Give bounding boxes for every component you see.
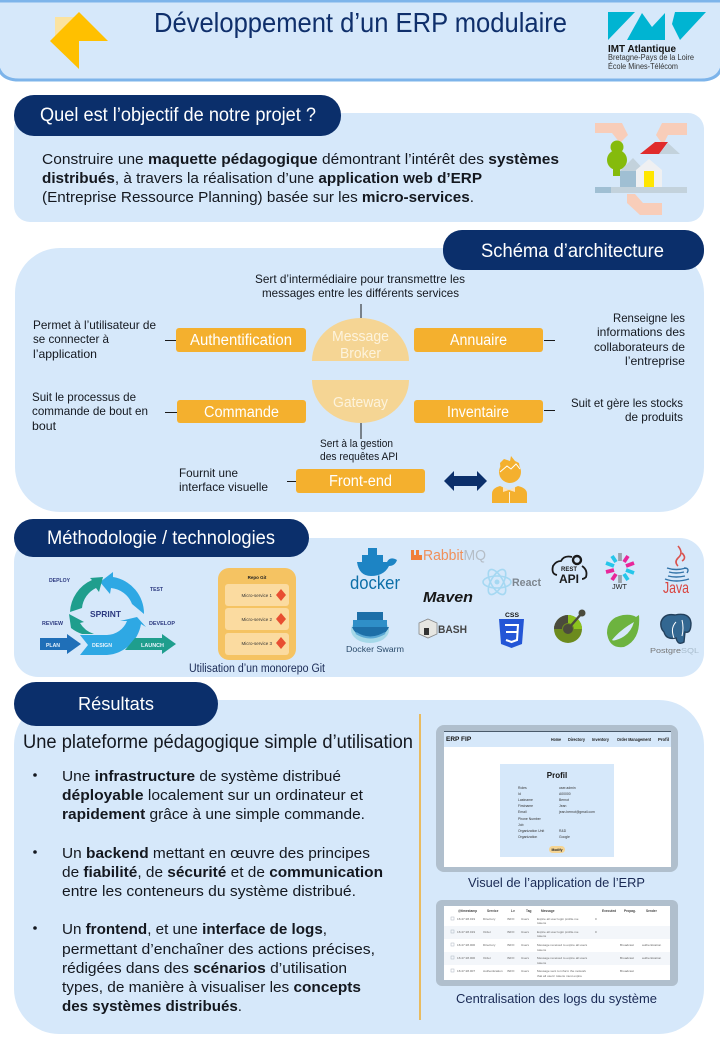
screenshot: application ERP: Jean <box>559 804 566 808</box>
bullet: infrastructure: déployable localement sur un ordinateur et <box>62 787 364 804</box>
screenshot: logs table: that all users' tokens must expire <box>537 974 582 978</box>
panel: résultats <box>14 682 704 1034</box>
service: front-end <box>296 469 425 493</box>
screenshot: logs table: INFO <box>507 969 515 973</box>
screenshot: logs table: Directory <box>483 943 496 947</box>
diagram: sprint cycle: DESIGN <box>92 643 112 649</box>
screenshot: logs table: authentication <box>642 956 662 960</box>
screenshot: logs table: Message sent to inform the network <box>537 969 586 973</box>
screenshot: logs table: Message received to expire all users <box>537 956 588 960</box>
diagram: sprint cycle: SPRINT <box>90 609 122 619</box>
logo: docker: docker <box>350 573 400 593</box>
screenshot: logs table <box>436 900 678 986</box>
screenshot: application ERP: A00000 <box>559 792 571 796</box>
text: message broker description: messages entre les différents services <box>262 286 459 300</box>
service: front-end: Front-end <box>329 473 392 490</box>
screenshot: application ERP: Job <box>518 823 524 827</box>
panel: header <box>0 1 720 80</box>
screenshot: application ERP: Organization Unit <box>518 829 544 833</box>
panel: architecture <box>15 230 704 512</box>
service: commande <box>177 400 306 423</box>
text: front-end description <box>179 466 268 494</box>
screenshot: application ERP: Profil <box>658 737 669 742</box>
screenshot: logs table: tokens <box>537 948 547 952</box>
screenshot: application ERP: Inventory <box>592 737 610 742</box>
screenshot: logs table: 16:47:28.019 <box>457 930 475 934</box>
screenshot: application ERP: ERP FIP <box>446 736 472 743</box>
logo: react: React <box>512 577 541 589</box>
screenshot: logs table: Expire all user login profile.me <box>537 930 579 934</box>
screenshot: logs table: Message received to expire all users <box>537 943 588 947</box>
diagram: monorepo git: Micro-service 2 <box>241 617 272 622</box>
screenshot: application ERP: jean.bernot@gmail.com <box>558 810 595 814</box>
screenshot: application ERP: Email <box>518 810 527 814</box>
text: authentification description: se connecter à <box>33 332 109 346</box>
screenshot: logs table: Users <box>521 943 530 947</box>
bullet: infrastructure: Une infrastructure de système distribué <box>62 768 341 785</box>
service: inventaire <box>414 400 543 423</box>
screenshot: application ERP: Firstname <box>518 804 533 808</box>
bullet: frontend: permettant d’enchaîner des actions précises, <box>62 941 375 958</box>
text: gateway description: des requêtes API <box>320 451 398 463</box>
screenshot: logs table: Message <box>541 909 555 913</box>
logo: IMT Atlantique: Bretagne-Pays de la Loire <box>608 53 695 62</box>
logo: bash: BASH <box>438 624 467 636</box>
text: gateway description <box>320 438 398 463</box>
screenshot: application ERP: Home <box>551 737 562 742</box>
text: annuaire description: Renseigne les <box>613 311 685 325</box>
arrow: front-end to user <box>444 471 487 491</box>
screenshot: application ERP: Phone Number <box>518 817 542 821</box>
logo: IMT Atlantique <box>608 12 706 71</box>
service: authentification <box>176 328 306 352</box>
heading: objectif: Quel est l’objectif de notre projet ? <box>40 105 316 126</box>
logo: jwt <box>606 553 634 591</box>
screenshot: logs table: Directory <box>483 917 496 921</box>
text: inventaire description: Suit et gère les stocks <box>571 396 683 410</box>
bullet: backend <box>33 845 383 900</box>
bullet: infrastructure <box>33 768 365 823</box>
text: authentification description <box>33 318 156 361</box>
heading: architecture: Schéma d’architecture <box>481 241 664 262</box>
heading: méthodologie <box>14 519 309 557</box>
screenshot: application ERP: Google <box>559 835 570 839</box>
screenshot: application ERP: Id <box>518 792 521 796</box>
text: inventaire description <box>571 396 683 424</box>
subheading: plateforme: Une plateforme pédagogique simple d’utilisation <box>23 732 413 753</box>
text: front-end description: interface visuelle <box>179 480 268 494</box>
panel: méthodologie <box>14 519 704 677</box>
diagram: sprint cycle: DEPLOY <box>49 578 70 584</box>
screenshot: logs table: 16:47:28.000 <box>457 956 475 960</box>
logo: java <box>663 546 689 597</box>
heading: objectif <box>14 95 341 136</box>
screenshot: application ERP: Order Management <box>617 737 652 742</box>
screenshot: logs table: Tag <box>526 909 531 913</box>
service: annuaire <box>414 328 543 352</box>
screenshot: logs table: Lv <box>511 909 515 913</box>
logo: rabbitmq: RabbitMQ <box>423 547 486 564</box>
service: annuaire: Annuaire <box>450 332 507 349</box>
bullet: backend: entre les conteneurs du système distribué. <box>62 883 356 900</box>
screenshot: logs table: Broadcast <box>620 956 634 960</box>
bullet: infrastructure: rapidement grâce à une simple commande. <box>62 806 365 823</box>
caption: application: Visuel de l’application de l’ERP <box>468 875 645 890</box>
screenshot: application ERP: Modify <box>552 848 563 852</box>
message broker block: Message <box>332 328 389 345</box>
bullet: backend: Un backend mettant en œuvre des principes <box>62 845 370 862</box>
screenshot: logs table: 16:47:28.019 <box>457 917 475 921</box>
text: annuaire description: collaborateurs de <box>594 340 685 354</box>
logo: jwt: JWT <box>612 582 627 591</box>
diagram: sprint cycle: REVIEW <box>42 621 64 627</box>
diagram: monorepo git <box>218 568 296 660</box>
text block: objectif: distribués, à travers la réalisation d’une application web d’ERP <box>42 170 482 187</box>
screenshot: application ERP: Profil <box>547 771 567 780</box>
title: Développement d’un ERP modulaire <box>154 7 567 38</box>
screenshot: logs table: tokens <box>537 921 547 925</box>
diagram: sprint cycle: PLAN <box>46 643 60 649</box>
text block: objectif: (Entreprise Ressource Planning) basée sur les micro-services. <box>42 189 474 206</box>
screenshot: logs table: Users <box>521 917 530 921</box>
bullet: frontend: des systèmes distribués. <box>62 998 242 1015</box>
screenshot: logs table: Sender <box>646 909 658 913</box>
logo: maven: Maven <box>423 589 473 606</box>
message broker block: Broker <box>340 345 381 362</box>
screenshot: logs table: Expire all user login profile.me <box>537 917 579 921</box>
screenshot: application ERP: Bernot <box>559 798 569 802</box>
screenshot: logs table: INFO <box>507 956 515 960</box>
screenshot: logs table: Users <box>521 956 530 960</box>
logo: rest api: REST <box>561 567 577 573</box>
heading: résultats: Résultats <box>78 694 154 714</box>
text: annuaire description: informations des <box>597 325 685 339</box>
heading: méthodologie: Méthodologie / technologies <box>47 528 275 549</box>
screenshot: logs table: Broadcast <box>620 943 634 947</box>
text: message broker description: Sert d’intermédiaire pour transmettre les <box>255 272 465 286</box>
text: annuaire description <box>594 311 685 368</box>
service: commande: Commande <box>204 404 279 421</box>
logo: bash <box>419 619 467 638</box>
logo: rest api: API <box>559 572 579 586</box>
logo: IMT Atlantique: IMT Atlantique <box>608 43 676 55</box>
heading: résultats <box>14 682 218 726</box>
logo: postgresql <box>650 614 699 655</box>
screenshot: logs table: Broadcast <box>620 969 634 973</box>
screenshot: logs table: INFO <box>507 930 515 934</box>
panel: objectif <box>14 95 704 222</box>
screenshot: logs table: 16:47:28.007 <box>457 969 475 973</box>
text block: objectif <box>42 151 559 206</box>
screenshot: logs table: Authentication <box>483 969 503 973</box>
diagram: sprint cycle: LAUNCH <box>141 643 164 649</box>
caption: logs: Centralisation des logs du système <box>456 991 657 1006</box>
diagram: monorepo git: Micro-service 1 <box>241 593 272 598</box>
text: front-end description: Fournit une <box>179 466 238 480</box>
logo: css3: CSS <box>505 613 519 619</box>
caption: monorepo: Utilisation d’un monorepo Git <box>189 663 326 675</box>
logo: IMT Atlantique: École Mines-Télécom <box>608 62 678 71</box>
logo: rest api <box>552 556 586 586</box>
text: commande description: commande de bout en <box>32 404 148 418</box>
heading: architecture <box>443 230 704 270</box>
bullet: frontend: Un frontend, et une interface de logs, <box>62 921 327 938</box>
icon: user <box>492 456 527 503</box>
bullet: frontend: rédigées dans des scénarios d’utilisation <box>62 960 347 977</box>
screenshot: logs table: 16:47:28.000 <box>457 943 475 947</box>
screenshot: logs table: @timestamp <box>458 909 477 913</box>
text: authentification description: Permet à l’utilisateur de <box>33 318 156 332</box>
text: authentification description: l’application <box>33 347 97 361</box>
service: inventaire: Inventaire <box>447 404 509 421</box>
screenshot: logs table: Propag. <box>624 909 636 913</box>
bullet: backend: de fiabilité, de sécurité et de communication <box>62 864 383 881</box>
screenshot: logs table: authentication <box>642 943 662 947</box>
service: authentification: Authentification <box>190 332 292 349</box>
screenshot: application ERP: Organization <box>518 835 537 839</box>
screenshot: application ERP <box>436 725 678 872</box>
logo: opentelemetry <box>554 610 586 643</box>
gateway block <box>312 380 409 423</box>
screenshot: logs table: Service <box>487 909 499 913</box>
screenshot: application ERP: Lastname <box>518 798 533 802</box>
text: message broker description <box>255 272 465 300</box>
screenshot: logs table: Users <box>521 969 530 973</box>
bullet: frontend: types, de manière à visualiser les concepts <box>62 979 361 996</box>
logo: react <box>483 567 541 597</box>
message broker block <box>312 318 409 362</box>
screenshot: application ERP: R&D <box>559 829 567 833</box>
gateway block: Gateway <box>333 394 388 411</box>
screenshot: logs table: 0 <box>595 930 597 934</box>
screenshot: application ERP: Roles <box>518 786 527 790</box>
icon: yellow arrow logo <box>50 12 108 69</box>
diagram: sprint cycle: TEST <box>150 587 164 593</box>
text: inventaire description: de produits <box>625 410 683 424</box>
screenshot: logs table: Executed <box>602 909 616 913</box>
screenshot: application ERP: Directory <box>568 737 586 742</box>
screenshot: logs table: Users <box>521 930 530 934</box>
logo: java: Java <box>663 580 689 597</box>
screenshot: logs table: 0 <box>595 917 597 921</box>
bullet: frontend <box>33 921 375 1015</box>
text: commande description: Suit le processus de <box>32 390 136 404</box>
text: annuaire description: l’entreprise <box>625 354 685 368</box>
logo: spring <box>607 615 639 647</box>
text: commande description: bout <box>32 419 57 433</box>
logo: docker swarm <box>346 612 404 654</box>
diagram: monorepo git: Micro-service 3 <box>241 641 272 646</box>
text block: objectif: Construire une maquette pédagogique démontrant l’intérêt des systèmes <box>42 151 559 168</box>
diagram: monorepo git: Repo Git <box>248 575 267 580</box>
icon: hands building a house <box>595 123 687 215</box>
text: gateway description: Sert à la gestion <box>320 438 393 450</box>
logo: docker <box>350 548 400 593</box>
logo: docker swarm: Docker Swarm <box>346 644 404 654</box>
text: commande description <box>32 390 148 433</box>
screenshot: logs table: Order <box>483 930 491 934</box>
logo: css3 <box>499 613 524 648</box>
diagram: sprint cycle: DEVELOP <box>149 621 175 627</box>
logo: postgresql: Postgre SQL <box>650 646 699 655</box>
screenshot: logs table: Order <box>483 956 491 960</box>
screenshot: logs table: tokens <box>537 934 547 938</box>
diagram: sprint cycle <box>40 572 176 655</box>
screenshot: logs table: INFO <box>507 917 515 921</box>
screenshot: logs table: tokens <box>537 961 547 965</box>
screenshot: application ERP: user.admin <box>559 786 576 790</box>
screenshot: logs table: INFO <box>507 943 515 947</box>
